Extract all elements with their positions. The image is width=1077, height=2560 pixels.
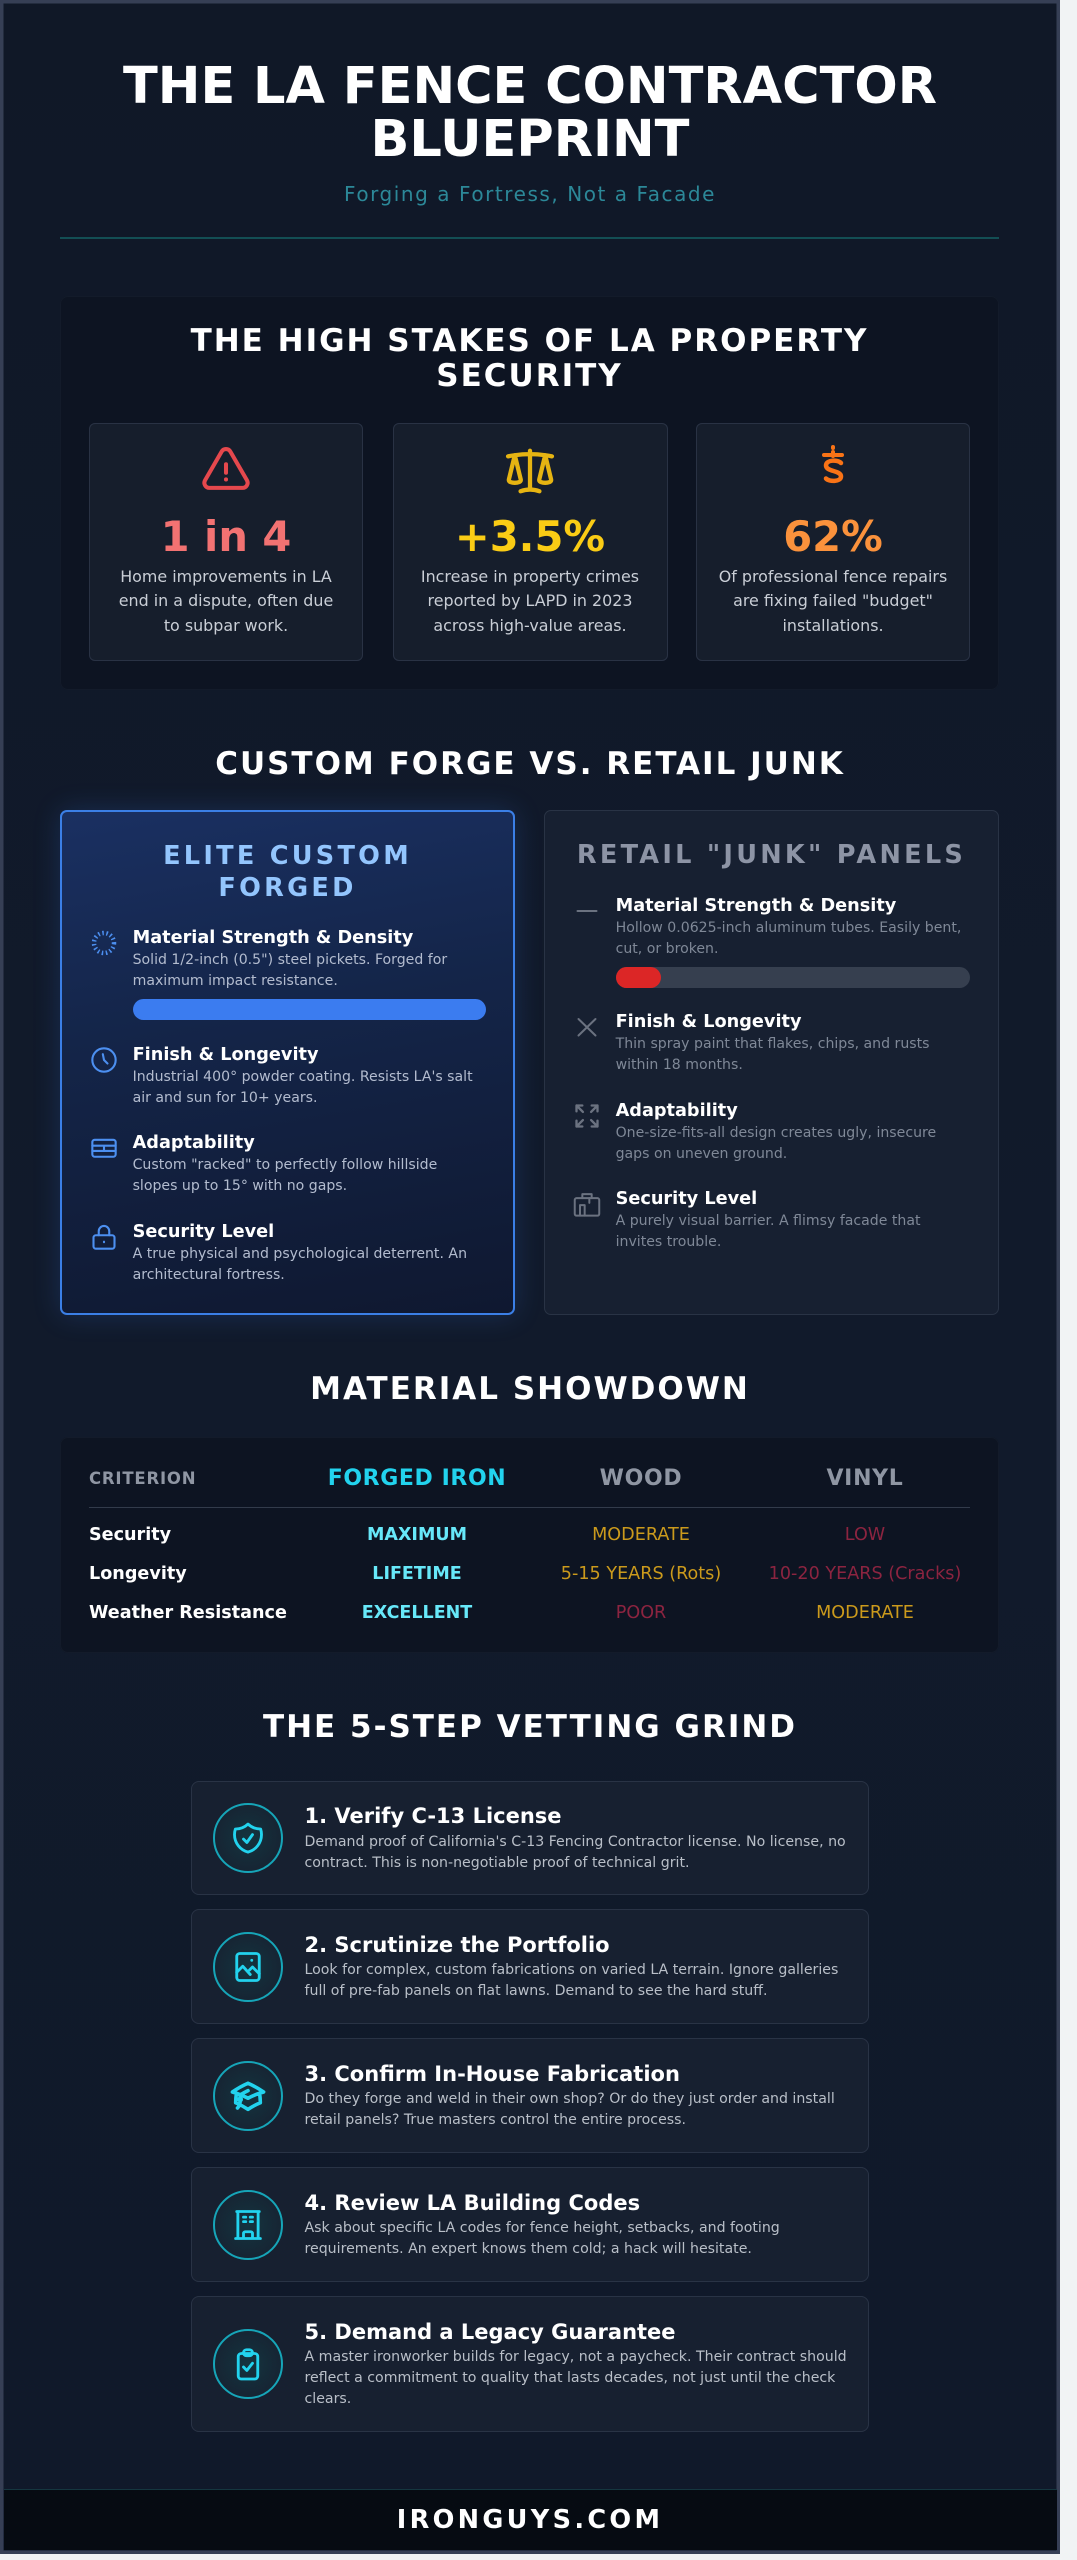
stat card: crimes [392, 423, 668, 661]
stat card: disputes [89, 423, 363, 661]
stat description [119, 567, 333, 635]
title: BLUEPRINT [371, 110, 689, 169]
strength bar track [616, 967, 970, 988]
step title: 1. Verify C-13 License [304, 1804, 562, 1828]
item description [616, 1212, 921, 1250]
stat description: across high-value areas. [433, 616, 627, 635]
item title: Security Level [616, 1188, 757, 1208]
icon: dollar dagger [822, 445, 844, 484]
heading: high stakes [190, 323, 868, 394]
item description [133, 1069, 473, 1106]
step description: requirements. An expert knows them cold; a hack will hesitate. [304, 2240, 752, 2256]
step description [304, 2346, 847, 2410]
step 2 card [191, 1909, 869, 2024]
item: adaptability [91, 1133, 437, 1194]
step description: contract. This is non-negotiable proof of technical grit. [304, 1854, 689, 1870]
item description [133, 1157, 437, 1194]
icon: photo [213, 1932, 283, 2002]
item title: Adaptability [133, 1133, 255, 1153]
stat description: reported by LAPD in 2023 [428, 591, 632, 610]
strength bar [133, 999, 486, 1020]
step description [304, 2090, 835, 2128]
row: longevity [89, 1564, 961, 1584]
panel: elite custom forged [60, 810, 515, 1315]
stat description [719, 567, 947, 635]
wood value: 5-15 YEARS (Rots) [561, 1564, 721, 1584]
heading: material showdown: MATERIAL SHOWDOWN [310, 1371, 750, 1407]
vinyl value: MODERATE [816, 1603, 914, 1623]
step title: 3. Confirm In-House Fabrication [304, 2062, 680, 2086]
step description: Ask about specific LA codes for fence height, setbacks, and footing [304, 2220, 780, 2236]
step description: full of pre-fab panels on flat lawns. Demand to see the hard stuff. [304, 1982, 768, 1998]
item description [133, 952, 448, 989]
step 5 card [191, 2296, 869, 2432]
row label: Longevity [89, 1564, 187, 1584]
item title: Material Strength & Density [616, 896, 896, 916]
item description: A purely visual barrier. A flimsy facade that [616, 1212, 921, 1228]
item description [616, 1036, 929, 1072]
item: material strength [576, 896, 961, 956]
item description: maximum impact resistance. [133, 973, 338, 989]
heading: high stakes: THE HIGH STAKES OF LA PROPERTY [191, 323, 868, 359]
subtitle: Forging a Fortress, Not a Facade [344, 182, 716, 206]
step description: Demand proof of California's C-13 Fencing Contractor license. No license, no [304, 1834, 846, 1850]
icon: lock [92, 1224, 116, 1250]
row: weather resistance [89, 1603, 914, 1623]
icon: scales [506, 448, 554, 494]
step description: retail panels? True masters control the entire process. [304, 2112, 686, 2128]
icon: expand arrows [575, 1104, 599, 1128]
stat number: 1 in 4 [161, 512, 291, 560]
icon: clipboard check [213, 2329, 283, 2399]
icon: warning triangle [202, 447, 250, 490]
panel: high stakes [60, 296, 999, 690]
icon: cross [578, 1018, 596, 1036]
item description: Hollow 0.0625-inch aluminum tubes. Easily bent, [616, 920, 961, 936]
vinyl value: LOW [845, 1525, 885, 1545]
forged iron value: EXCELLENT [362, 1603, 472, 1623]
wood value: POOR [616, 1603, 666, 1623]
vinyl value: 10-20 YEARS (Cracks) [769, 1564, 961, 1584]
wood header: WOOD [600, 1466, 682, 1490]
item: adaptability [575, 1100, 936, 1162]
forged iron header: FORGED IRON [328, 1466, 506, 1490]
title [123, 56, 937, 169]
panel title [163, 841, 412, 903]
heading: high stakes: SECURITY [436, 358, 623, 394]
strength bar fill [616, 967, 660, 988]
item description: Custom "racked" to perfectly follow hillside [133, 1157, 437, 1173]
step description [304, 2218, 780, 2260]
title: THE LA FENCE CONTRACTOR [123, 56, 937, 116]
step description: Look for complex, custom fabrications on varied LA terrain. Ignore galleries [304, 1962, 838, 1978]
item: security [574, 1188, 921, 1250]
stat card: repairs [696, 423, 970, 661]
step description: Do they forge and weld in their own shop? Or do they just order and install [304, 2090, 835, 2106]
item title: Finish & Longevity [616, 1012, 802, 1032]
panel title: ELITE CUSTOM [163, 841, 412, 871]
forged iron value: LIFETIME [372, 1564, 462, 1584]
item description: cut, or broken. [616, 940, 718, 956]
stat number: +3.5% [455, 512, 605, 560]
item description: within 18 months. [616, 1056, 743, 1072]
item description: Industrial 400° powder coating. Resists LA's salt [133, 1069, 473, 1085]
item: finish [578, 1012, 929, 1072]
icon: panel table [91, 1138, 117, 1158]
step 3 card [191, 2038, 869, 2153]
item description [616, 920, 961, 956]
step 1 card [191, 1781, 869, 1895]
icon: shield check [213, 1803, 283, 1873]
icon: broken case [574, 1193, 600, 1217]
stat description: are fixing failed "budget" [733, 591, 933, 610]
panel title: FORGED [218, 873, 357, 903]
item description: A true physical and psychological deterrent. An [133, 1246, 467, 1262]
header divider [60, 237, 999, 239]
item description: architectural fortress. [133, 1267, 285, 1283]
step title: 5. Demand a Legacy Guarantee [304, 2320, 676, 2344]
heading: custom forge vs retail junk: CUSTOM FORGE VS. RETAIL JUNK [215, 746, 845, 782]
item description: slopes up to 15° with no gaps. [133, 1178, 347, 1194]
step title: 4. Review LA Building Codes [304, 2190, 640, 2214]
step description: A master ironworker builds for legacy, not a paycheck. Their contract should [304, 2348, 847, 2364]
wood value: MODERATE [592, 1525, 690, 1545]
stat description: to subpar work. [164, 616, 288, 635]
heading: vetting steps: THE 5-STEP VETTING GRIND [263, 1709, 797, 1745]
row label: Weather Resistance [89, 1603, 287, 1623]
step description [304, 1834, 846, 1870]
step 4 card [191, 2167, 869, 2282]
stat description: Of professional fence repairs [719, 567, 947, 586]
item description: air and sun for 10+ years. [133, 1090, 317, 1106]
criterion header: CRITERION [89, 1468, 196, 1488]
icon: forge cap [213, 2061, 283, 2131]
row: security [89, 1525, 885, 1545]
stat description [421, 567, 639, 635]
item description [616, 1124, 936, 1162]
item: security [92, 1222, 467, 1283]
stat description: Home improvements in LA [120, 567, 332, 586]
footer brand: IRONGUYS.COM [397, 2505, 663, 2535]
forged iron value: MAXIMUM [367, 1525, 467, 1545]
icon: burst [92, 930, 116, 956]
item description: Solid 1/2-inch (0.5") steel pickets. Forged for [133, 952, 447, 968]
item: material strength [92, 928, 448, 989]
item title: Material Strength & Density [133, 928, 413, 948]
row label: Security [89, 1525, 171, 1545]
item description: gaps on uneven ground. [616, 1146, 787, 1162]
stat description: end in a dispute, often due [119, 591, 333, 610]
item title: Finish & Longevity [133, 1045, 319, 1065]
panel title: RETAIL "JUNK" PANELS [577, 840, 966, 870]
step title: 2. Scrutinize the Portfolio [304, 1932, 610, 1956]
vinyl header: VINYL [826, 1466, 904, 1490]
panel: retail junk [544, 810, 999, 1315]
icon: building [213, 2190, 283, 2260]
table header divider [89, 1507, 970, 1508]
step description: reflect a commitment to quality that lasts decades, not just until the check [304, 2370, 835, 2386]
stat description: Increase in property crimes [421, 567, 639, 586]
item: finish [91, 1045, 473, 1106]
item description [132, 1246, 467, 1283]
item description: invites trouble. [616, 1234, 721, 1250]
item description: One-size-fits-all design creates ugly, insecure [616, 1124, 936, 1140]
step description: clears. [304, 2390, 351, 2406]
panel: comparison table [60, 1437, 999, 1653]
footer [4, 2489, 1056, 2550]
icon: minus [576, 910, 598, 912]
step description [304, 1962, 838, 1998]
item description: Thin spray paint that flakes, chips, and rusts [616, 1036, 929, 1052]
stat description: installations. [782, 616, 884, 635]
icon: clock [91, 1047, 117, 1073]
stat number: 62% [783, 512, 883, 560]
item title: Security Level [133, 1222, 274, 1242]
table header row [89, 1466, 904, 1490]
item title: Adaptability [616, 1100, 738, 1120]
